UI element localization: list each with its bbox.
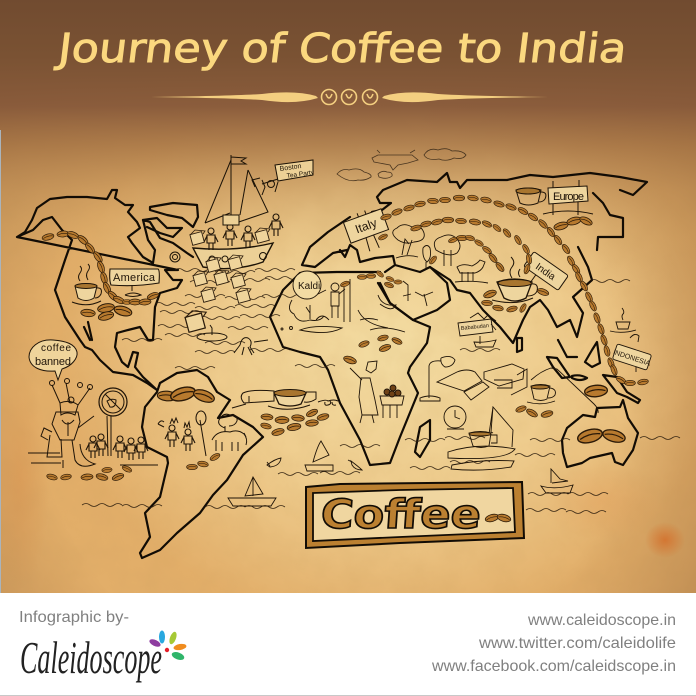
sign and cup: Europe: Europe	[553, 191, 584, 203]
website links: www.caleidoscope.in	[527, 612, 676, 629]
title: Journey of Coffee to India	[52, 26, 629, 72]
sign: India: India	[533, 262, 558, 283]
footer panel	[0, 593, 696, 696]
illustration: South American tribe and elephant	[158, 411, 247, 456]
illustration: Indonesia cup and sign	[610, 308, 653, 372]
label: America: America	[113, 272, 156, 284]
illustration: ship with Boston Tea Party	[170, 155, 283, 355]
sign: Italy	[342, 205, 393, 256]
label: Kaldi: Kaldi	[298, 281, 320, 292]
sign: hills: Bababudan	[461, 323, 489, 332]
sign: Boston Tea Party: Boston	[279, 163, 302, 173]
coffee bean trails	[41, 194, 649, 482]
ornament divider	[151, 90, 548, 104]
speech bubble: coffee banned	[29, 340, 77, 380]
continent: Africa	[270, 272, 430, 465]
illustration: plane and clouds	[337, 149, 466, 181]
byline: Infographic by-	[19, 609, 129, 626]
continent: North America	[17, 190, 193, 390]
sign and cup: Europe	[516, 180, 593, 215]
sign: Boston Tea Party	[275, 160, 315, 181]
logo flower	[148, 630, 187, 662]
illustration: cup and book beans near Australia	[527, 384, 555, 404]
peninsula: Arabia	[380, 267, 450, 320]
illustration: America cup, sign and steam	[72, 264, 159, 305]
illustration: Africa coffee merchant	[350, 361, 404, 423]
illustration: newspaper and cup	[232, 390, 338, 409]
logo wordmark: Caleidoscope	[20, 632, 162, 683]
illustration: Indonesia cup and sign: INDONESIA	[612, 349, 651, 368]
illustration: books, lamp and clock	[420, 356, 598, 429]
sign: India	[524, 252, 568, 290]
sign: Italy: Italy	[353, 216, 379, 236]
sign: hills	[458, 313, 496, 347]
islands: Arctic Canada	[84, 203, 198, 340]
illustration: India cup, steam and sign	[492, 257, 540, 303]
illustration: Middle East trees, sheep and figures	[344, 225, 488, 332]
sign: Boston Tea Party: Tea Party	[286, 169, 315, 180]
speech bubble: coffee banned: banned	[35, 356, 71, 368]
continent: Eurasia	[302, 173, 647, 343]
illustration: cup on boat	[448, 407, 515, 470]
illustration: sailboats and fish	[228, 441, 573, 506]
sea waves	[82, 268, 680, 514]
illustration: king banning coffee	[28, 378, 158, 468]
continent: Australia	[562, 400, 638, 467]
Coffee signboard	[306, 482, 524, 548]
website links: www.twitter.com/caleidolife	[478, 635, 676, 652]
illustration: Kaldi goatherd and bushes	[281, 271, 345, 333]
continent: South America	[140, 370, 263, 558]
website links: www.facebook.com/caleidscope.in	[431, 658, 676, 675]
world map outlines	[17, 173, 647, 558]
islands: Indonesia and Madagascar	[415, 338, 640, 457]
speech bubble: coffee banned: coffee	[41, 343, 71, 354]
website links	[431, 612, 676, 675]
Coffee signboard: Coffee	[319, 492, 483, 538]
